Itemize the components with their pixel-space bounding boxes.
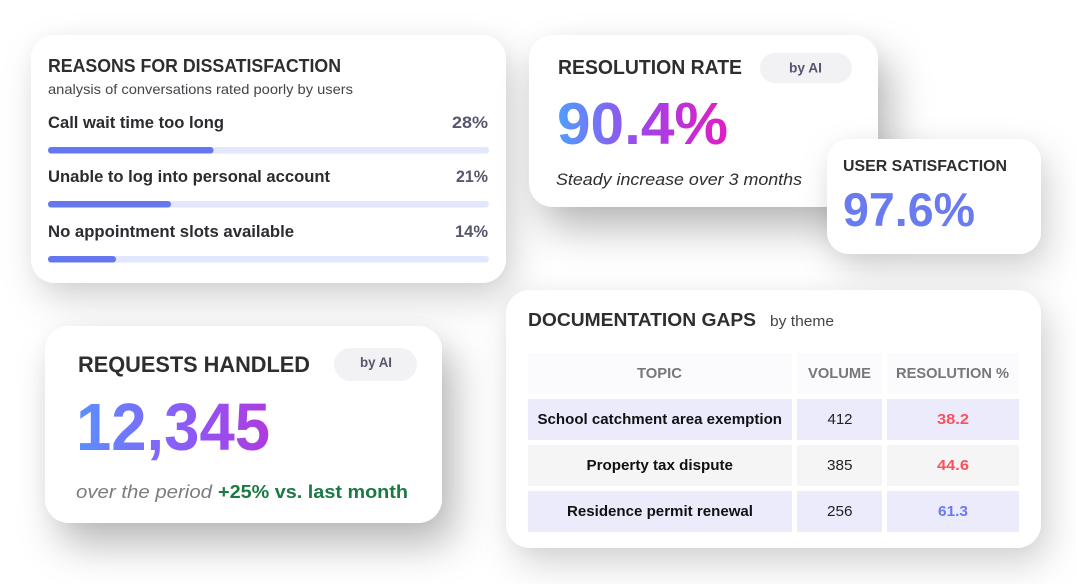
row: unable to log in — [48, 168, 489, 208]
metric: 90.4%: 90.4% — [557, 91, 728, 157]
row: school catchment: 38.2 — [937, 411, 969, 428]
badge: by AI — [760, 53, 852, 83]
row: property tax: 385 — [827, 457, 852, 474]
heading: documentation gaps: DOCUMENTATION GAPS — [528, 310, 756, 330]
row: property tax: 44.6 — [937, 457, 969, 474]
panel: requests handled — [45, 326, 442, 523]
table — [528, 353, 1019, 532]
row: call wait time: 28% — [452, 114, 488, 132]
metric: 97.6%: 97.6% — [843, 183, 975, 236]
heading: reasons for dissatisfaction: REASONS FOR DISSATISFACTION — [48, 56, 341, 76]
table header row: RESOLUTION % — [896, 365, 1009, 382]
caption: growth vs last month: +25% vs. last month — [218, 482, 408, 502]
panel: reasons for dissatisfaction — [31, 35, 506, 283]
caption: over the period: over the period — [76, 482, 213, 502]
panel: user satisfaction — [827, 139, 1041, 254]
table header row: TOPIC — [637, 365, 682, 382]
panel: documentation gaps — [506, 290, 1041, 548]
caption: steady increase: Steady increase over 3 months — [556, 171, 802, 189]
row: unable to log in: 21% — [456, 168, 488, 186]
heading: user satisfaction: USER SATISFACTION — [843, 158, 1007, 175]
row: school catchment: School catchment area exemption — [538, 411, 782, 428]
badge: by AI — [334, 348, 417, 381]
row: property tax: Property tax dispute — [586, 457, 733, 474]
row: residence permit: 61.3 — [938, 503, 968, 520]
heading: resolution rate: RESOLUTION RATE — [558, 57, 742, 79]
row: call wait time: Call wait time too long — [48, 114, 224, 132]
row: property tax — [528, 445, 1019, 486]
table header row — [528, 353, 1019, 394]
metric: 12,345: 12,345 — [76, 390, 270, 465]
row: residence permit: 256 — [827, 503, 852, 520]
row: no appointment slots — [48, 223, 489, 262]
panel: resolution rate — [529, 35, 878, 207]
row: no appointment slots: No appointment slots available — [48, 223, 294, 241]
subtitle: by theme: by theme — [770, 314, 834, 330]
heading: requests handled: REQUESTS HANDLED — [78, 352, 310, 377]
badge: by AI: by AI — [360, 355, 392, 370]
row: call wait time — [48, 114, 489, 154]
subtitle: analysis of conversations rated poorly by users — [48, 81, 353, 97]
row: school catchment: 412 — [828, 411, 853, 428]
table header row: VOLUME — [808, 365, 871, 382]
row: no appointment slots: 14% — [455, 223, 488, 241]
row: unable to log in: Unable to log into personal account — [48, 168, 330, 186]
row: residence permit — [528, 491, 1019, 532]
row: school catchment — [528, 399, 1019, 440]
row: residence permit: Residence permit renewal — [567, 503, 753, 520]
badge: by AI: by AI — [789, 60, 822, 76]
